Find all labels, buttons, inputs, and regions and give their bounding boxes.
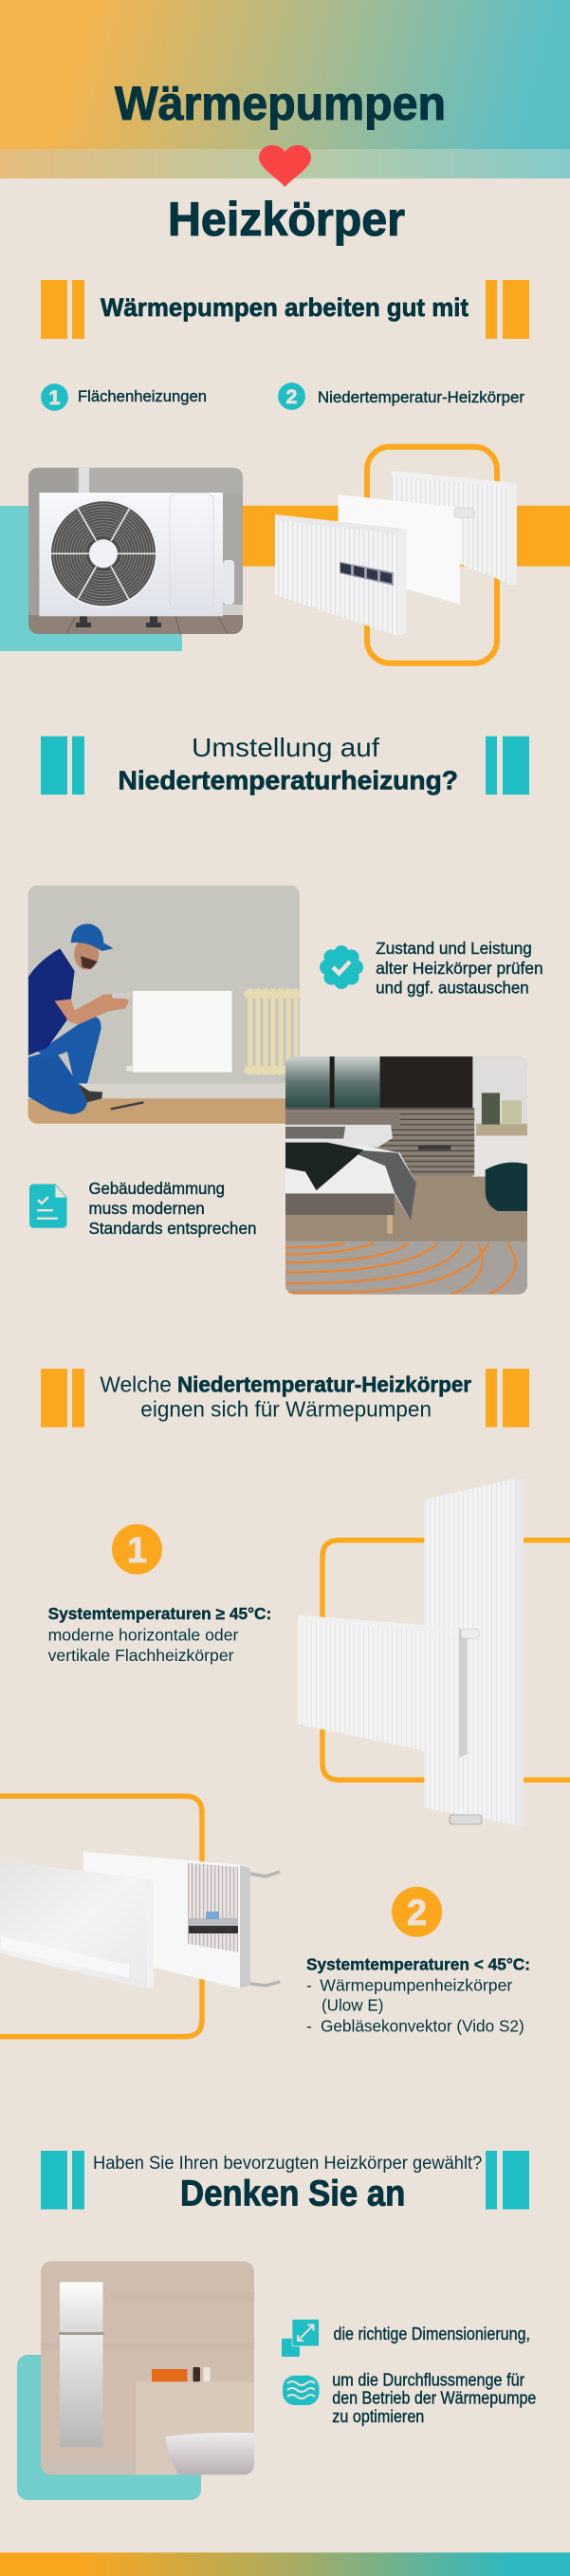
text: Durchflussmenge: den Betrieb der Wärmepumpe	[332, 2389, 536, 2408]
list item 1: Flächenheizungen: 1	[49, 387, 61, 409]
horizontal radiator	[298, 1615, 479, 1758]
floor heating pipes	[285, 1241, 527, 1295]
vertical radiator	[424, 1479, 524, 1826]
photo: bedroom with underfloor heating	[285, 1056, 527, 1295]
pipes	[250, 1872, 280, 1986]
icon: water flow waves	[283, 2376, 319, 2405]
radiator front	[275, 514, 406, 636]
photo: technician at radiator	[28, 886, 300, 1124]
heading: Welche Niedertemperatur-Heizkörper: eignen sich für Wärmepumpen	[140, 1397, 432, 1422]
orange frame right	[322, 1540, 570, 1780]
wrench on floor	[111, 1102, 143, 1109]
icon: heart	[259, 145, 311, 187]
front panel	[0, 1861, 154, 1988]
photo: outdoor heat pump unit	[28, 468, 243, 634]
list item 2: Niedertemperatur-Heizkörper: 2	[286, 386, 297, 408]
image: vertical and horizontal radiators	[298, 1479, 524, 1826]
number badge 1	[112, 1524, 162, 1575]
number badge 2: 2	[407, 1894, 427, 1933]
text: Zustand und Leistung: Zustand und Leistung	[376, 939, 532, 958]
text: Systemtemperaturen < 45°C: Wärmepumpenheizkörper	[320, 1975, 512, 1994]
heading: Umstellung auf Niedertemperaturheizung?: Niedertemperaturheizung?	[118, 766, 458, 795]
text: Systemtemperaturen ≥ 45°C: Systemtemperaturen ≥ 45°C:	[48, 1604, 271, 1623]
heading: Wärmepumpen arbeiten gut mit: Wärmepumpen arbeiten gut mit	[101, 293, 469, 322]
text: Systemtemperaturen < 45°C: (Ulow E)	[322, 1996, 383, 2015]
photo: bathroom with vertical radiator	[41, 2261, 254, 2475]
old cream radiator	[245, 989, 300, 1074]
text: Gebäudedämmung: muss modernen	[89, 1199, 205, 1218]
footer gradient band	[0, 2552, 570, 2576]
text: Systemtemperaturen < 45°C	[306, 1955, 530, 2036]
orange rounded frame	[367, 447, 497, 663]
radiator	[59, 2282, 104, 2447]
heading: Welche Niedertemperatur-Heizkörper	[41, 1369, 529, 1428]
radiator middle panel	[338, 495, 460, 605]
radiator back	[392, 471, 517, 585]
heading: Wärmepumpen arbeiten gut mit	[41, 280, 529, 339]
connector block	[340, 562, 394, 586]
technician figure	[28, 924, 131, 1114]
text: Systemtemperaturen ≥ 45°C	[48, 1604, 271, 1665]
text: die richtige Dimensionierung: die richtige Dimensionierung,	[334, 2324, 530, 2343]
text: Zustand und Leistung: und ggf. austauschen	[376, 979, 529, 998]
text: Systemtemperaturen ≥ 45°C: moderne horizontale oder	[48, 1625, 239, 1644]
text: Durchflussmenge	[332, 2370, 536, 2426]
title: Wärmepumpen: Wärmepumpen	[115, 77, 446, 130]
list item 2: Niedertemperatur-Heizkörper	[278, 383, 524, 410]
text: Zustand und Leistung	[376, 939, 543, 998]
heading: Welche Niedertemperatur-Heizkörper: Niedertemperatur-Heizkörper	[177, 1372, 471, 1397]
list item 2: Niedertemperatur-Heizkörper: Niedertemperatur-Heizkörper	[318, 388, 524, 406]
text: Systemtemperaturen < 45°C: Systemtemperaturen < 45°C:	[306, 1955, 530, 1974]
bathtub	[165, 2433, 254, 2474]
text: Systemtemperaturen < 45°C: -	[306, 1975, 312, 1994]
towels and bottles	[152, 2367, 211, 2381]
pouf	[486, 1163, 527, 1211]
text: Durchflussmenge: um die Durchflussmenge für	[332, 2370, 524, 2389]
text: Systemtemperaturen ≥ 45°C: vertikale Flachheizkörper	[48, 1646, 234, 1665]
heading: Denken Sie an: Haben Sie Ihren bevorzugten Heizkörper gewählt?	[93, 2154, 482, 2174]
back panel	[83, 1852, 250, 1988]
list item 1: Flächenheizungen	[41, 383, 207, 411]
heading: Umstellung auf Niedertemperaturheizung?: Umstellung auf	[192, 733, 379, 762]
icon: check badge	[320, 945, 363, 989]
text: Zustand und Leistung: alter Heizkörper prüfen	[376, 959, 543, 978]
text: Gebäudedämmung	[89, 1179, 256, 1238]
teal rounded block	[17, 2355, 201, 2500]
heading: Denken Sie an	[41, 2151, 529, 2214]
text: Durchflussmenge: zu optimieren	[332, 2407, 424, 2426]
heading: Umstellung auf Niedertemperaturheizung?	[41, 733, 529, 795]
thermostat valve	[454, 508, 474, 518]
header gradient band	[0, 0, 570, 178]
flat white radiator	[133, 991, 232, 1073]
text: Gebäudedämmung: Gebäudedämmung	[89, 1179, 225, 1198]
number badge 1: 1	[127, 1531, 147, 1571]
title: Heizkörper: Heizkörper	[168, 193, 405, 246]
orange frame left	[0, 1796, 202, 2037]
image: heat pump radiator and fan convector	[0, 1852, 280, 1988]
icon: checklist document	[29, 1185, 66, 1228]
text: Gebäudedämmung: Standards entsprechen	[89, 1219, 256, 1238]
text: Systemtemperaturen < 45°C: Gebläsekonvektor (Vido S2)	[321, 2017, 524, 2036]
number badge 2	[392, 1887, 442, 1937]
teal block behind heat pump photo	[0, 506, 182, 651]
heading: Welche Niedertemperatur-Heizkörper: Welche	[100, 1372, 172, 1397]
bed	[285, 1125, 416, 1234]
text: Systemtemperaturen < 45°C: -	[306, 2017, 312, 2036]
list item 1: Flächenheizungen: Flächenheizungen	[78, 387, 207, 405]
icon: dimension arrows	[282, 2319, 319, 2357]
open section	[188, 1863, 238, 1952]
heading: Denken Sie an: Denken Sie an	[180, 2175, 405, 2214]
image: three radiators	[275, 471, 517, 636]
orange band	[243, 506, 570, 567]
